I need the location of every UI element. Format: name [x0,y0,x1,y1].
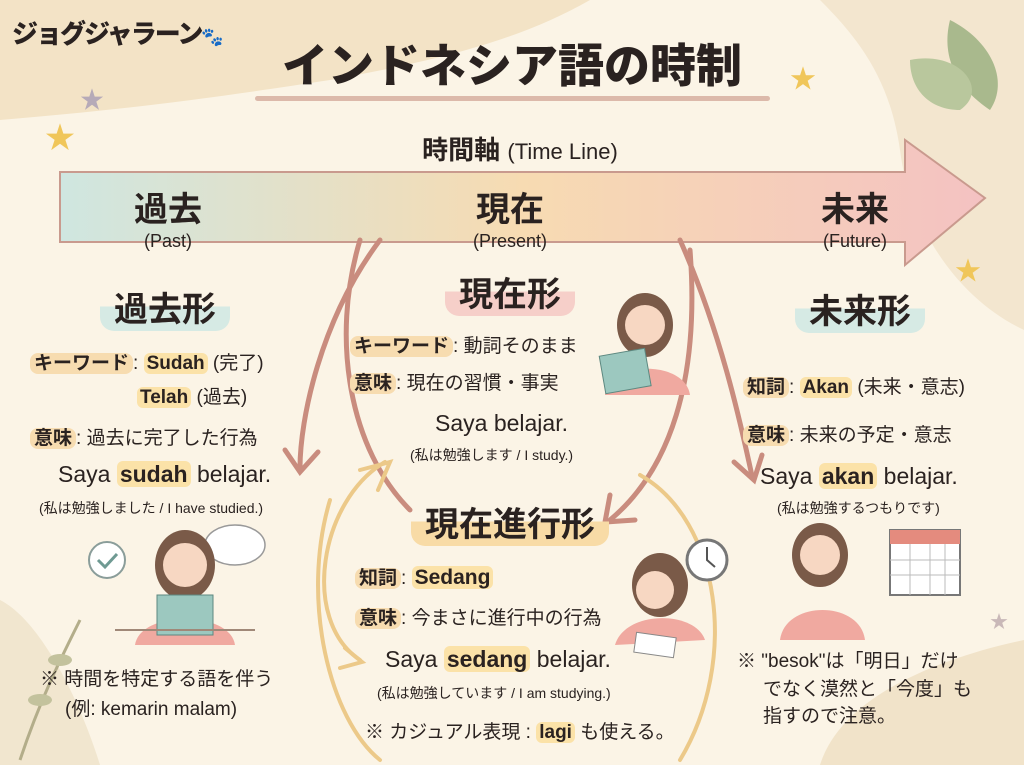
text: (Future) [823,231,887,251]
panel: present: 意味: 現在の習慣・事実 [354,373,559,394]
icon: girl reading present [598,293,690,395]
heading present: 現在形 [459,276,561,314]
panel: progressive: ※ カジュアル表現 : lagi も使える。 [365,722,675,743]
heading past: 過去形 [114,291,216,329]
title: インドネシア語の時制 [282,40,742,92]
icon: girl with calendar [780,523,961,640]
panel: past: ※ 時間を特定する語を伴う [40,669,273,690]
background decor: ★ [80,87,104,114]
logo: ジョグジャラーン🐾 [12,19,222,49]
panel: future: 知詞: Akan (未来・意志) [747,377,965,398]
panel: future: 意味: 未来の予定・意志 [747,425,952,446]
heading present [445,267,575,316]
text: (Present) [473,231,547,251]
panel: present [350,276,690,463]
timeline arrow [59,138,986,267]
background decor: ★ [790,64,816,94]
icon: girl reading [88,524,266,645]
panel: progressive: (私は勉強しています / I am studying.) [377,685,611,701]
panel: future: でなく漠然と「今度」も [763,679,972,700]
timeline labels: 過去 [134,191,202,229]
panel: past: Saya sudah belajar. [58,461,271,487]
panel: future: Saya akan belajar. [760,463,958,489]
panel: past: Telah (過去) [140,387,247,408]
timeline labels: (Past) [144,231,192,251]
panel: past [30,291,273,720]
panel: progressive: Saya sedang belajar. [385,646,611,672]
text: 未来 [821,191,889,229]
panel: present: キーワード: 動詞そのまま [354,336,578,357]
panel: future: ※ "besok"は「明日」だけ [737,651,958,672]
icon: girl writing with clock [615,538,728,658]
panel: progressive: 意味: 今まさに進行中の行為 [359,608,602,629]
text: 現在 [476,191,544,229]
background decor: ★ [955,256,981,286]
panel: past: (私は勉強しました / I have studied.) [39,500,263,516]
heading past [100,282,230,331]
heading future [795,284,925,333]
heading progressive: 現在進行形 [425,506,595,544]
timeline label: 時間軸 (Time Line) [422,135,618,165]
panel: present: Saya belajar. [435,410,568,436]
panel: future [737,293,972,727]
panel: past: キーワード: Sudah (完了) [34,353,264,374]
panel: progressive: 知詞: Sedang [359,566,490,589]
background decor: ★ [990,612,1008,632]
background decor: ★ [45,122,75,155]
panel: progressive [355,506,728,743]
panel: past: (例: kemarin malam) [65,699,237,720]
panel: future: 指すので注意。 [763,706,896,727]
timeline labels [134,191,202,251]
heading progressive [411,497,609,546]
heading future: 未来形 [809,293,911,331]
panel: present: (私は勉強します / I study.) [410,447,573,463]
panel: future: (私は勉強するつもりです) [777,500,940,516]
panel: past: 意味: 過去に完了した行為 [34,428,258,449]
